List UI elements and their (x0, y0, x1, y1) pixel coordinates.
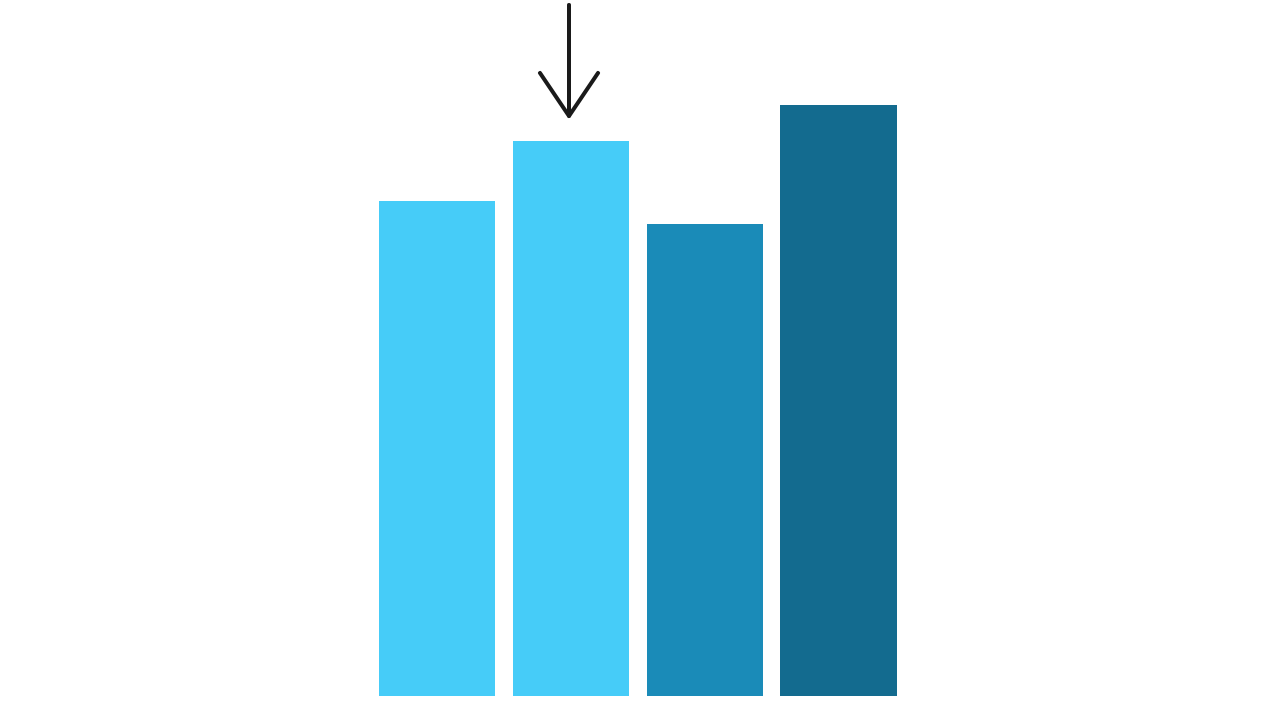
bar 1 (379, 201, 495, 696)
bar 2 (513, 141, 629, 696)
bar 4 (780, 105, 897, 696)
arrow: pointing down at bar 2 (540, 5, 598, 116)
bar 3 (647, 224, 763, 696)
